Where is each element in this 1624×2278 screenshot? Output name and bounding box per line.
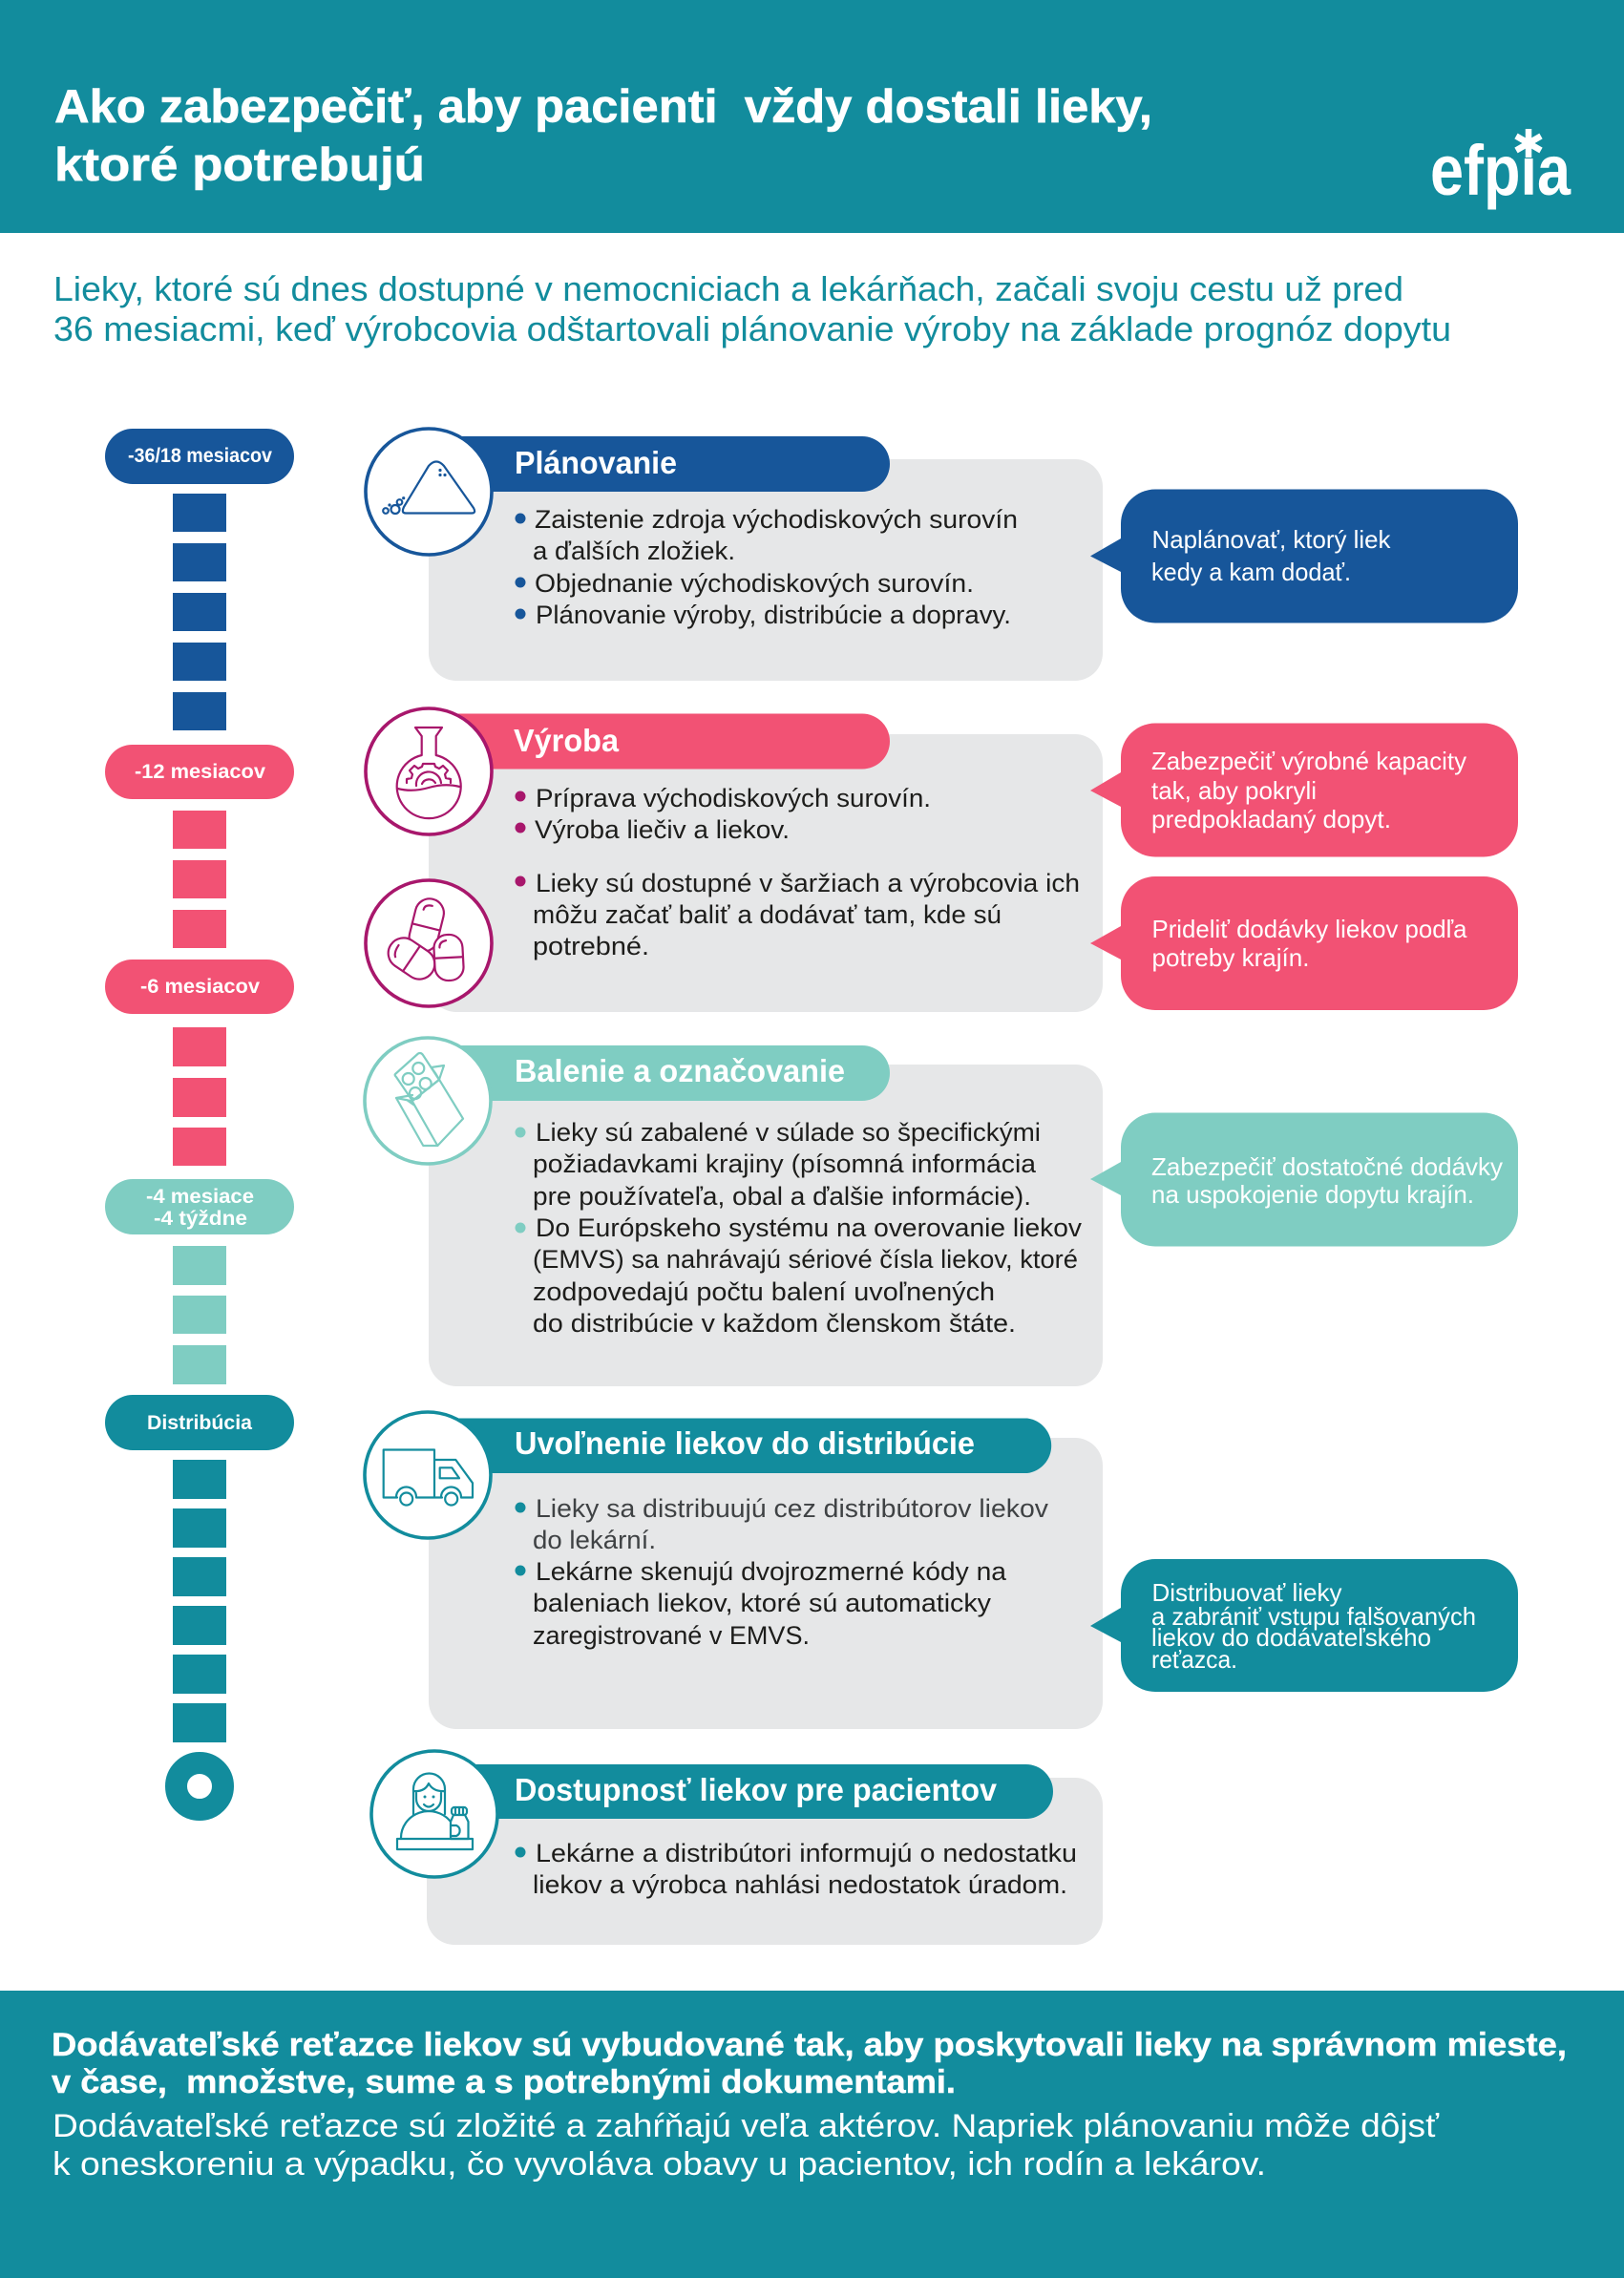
intro text: Lieky, ktoré sú dnes dostupné v nemocniciach a lekárňach, začali svoju cestu už pred xyxy=(53,269,1403,308)
heading: Uvoľnenie liekov do distribúcie: Uvoľnenie liekov do distribúcie xyxy=(515,1425,975,1461)
timeline steps: packaging xyxy=(173,1246,226,1384)
milestone: -6 mesiacov: -6 mesiacov xyxy=(140,976,260,998)
icon: raw material pile xyxy=(366,429,492,555)
footer key message: Dodávateľské reťazce liekov sú vybudované tak, aby poskytovali lieky na správnom mieste, xyxy=(52,2027,1567,2063)
panel: Dostupnosť liekov pre pacientov xyxy=(371,1751,1103,1945)
milestone: -36/18 mesiacov: -36/18 mesiacov xyxy=(128,445,272,467)
milestone: -6 mesiacov xyxy=(105,960,294,1014)
milestone: -4 mesiace -4 týždne: -4 mesiace xyxy=(146,1186,254,1208)
panel: Výroba xyxy=(366,708,1103,1012)
bullet list xyxy=(516,1494,1049,1650)
footer band xyxy=(0,1991,1624,2278)
milestone: -12 mesiacov: -12 mesiacov xyxy=(135,761,265,783)
callout: allocation: Prideliť dodávky liekov podľa xyxy=(1151,915,1467,943)
bullet list: potrebné. xyxy=(533,932,649,960)
milestone: -4 mesiace -4 týždne: -4 týždne xyxy=(154,1208,247,1230)
timeline steps: planning xyxy=(173,494,226,730)
title xyxy=(54,81,1152,191)
bullet list: zodpovedajú počtu balení uvoľnených xyxy=(533,1277,995,1306)
callout: capacity: Zabezpečiť výrobné kapacity xyxy=(1151,747,1466,775)
bullet list: Príprava východiskových surovín. xyxy=(536,784,931,812)
bullet list: Plánovanie výroby, distribúcie a dopravy. xyxy=(536,601,1011,629)
callout: supply xyxy=(1090,1113,1518,1247)
milestone: Distribúcia xyxy=(105,1395,294,1450)
milestone: -12 mesiacov xyxy=(105,745,294,799)
callout: allocation: potreby krajín. xyxy=(1151,943,1310,972)
bullet list: Do Európskeho systému na overovanie liekov xyxy=(536,1213,1083,1242)
panel: Plánovanie xyxy=(366,429,1103,681)
title: ktoré potrebujú xyxy=(54,139,425,191)
callout: distribution xyxy=(1090,1559,1518,1692)
bullet list xyxy=(516,1839,1077,1899)
timeline steps: manufacture xyxy=(173,811,226,948)
heading: Plánovanie xyxy=(429,436,890,492)
callout: supply: na uspokojenie dopytu krajín. xyxy=(1151,1180,1474,1209)
bullet list: a ďalších zložiek. xyxy=(533,537,735,565)
icon: delivery truck xyxy=(365,1412,491,1538)
panel: Uvoľnenie liekov do distribúcie xyxy=(365,1412,1103,1729)
heading: Balenie a označovanie xyxy=(429,1045,890,1101)
bullet list: do distribúcie v každom členskom štáte. xyxy=(533,1309,1016,1338)
bullet list: Objednanie východiskových surovín. xyxy=(535,569,974,598)
bullet list: Lekárne a distribútori informujú o nedostatku xyxy=(536,1839,1077,1867)
heading: Dostupnosť liekov pre pacientov xyxy=(434,1764,1053,1819)
heading: Plánovanie: Plánovanie xyxy=(515,445,677,480)
callout: planning: kedy a kam dodať. xyxy=(1151,558,1351,586)
bullet list: Lieky sú zabalené v súlade so špecifickými xyxy=(536,1118,1041,1147)
bullet list: zaregistrované v EMVS. xyxy=(533,1621,810,1650)
footer text: k oneskoreniu a výpadku, čo vyvoláva obavy u pacientov, ich rodín a lekárov. xyxy=(53,2146,1266,2183)
heading: Výroba xyxy=(429,714,890,770)
icon: pharmacist xyxy=(371,1751,497,1877)
callout: distribution: reťazca. xyxy=(1151,1645,1237,1674)
heading: Výroba: Výroba xyxy=(514,723,620,758)
title: Ako zabezpečiť, aby pacienti vždy dostali lieky, xyxy=(54,81,1152,133)
footer key message: v čase, množstve, sume a s potrebnými dokumentami. xyxy=(52,2064,956,2100)
header band xyxy=(0,0,1624,233)
bullet list: Lekárne skenujú dvojrozmerné kódy na xyxy=(536,1557,1007,1586)
footer key message xyxy=(52,2027,1567,2100)
bullet list: Výroba liečiv a liekov. xyxy=(535,815,790,844)
bullet list xyxy=(516,505,1018,629)
callout: planning xyxy=(1090,489,1518,622)
callout: distribution: liekov do dodávateľského xyxy=(1151,1623,1431,1652)
bullet list: (EMVS) sa nahrávajú sériové čísla liekov, ktoré xyxy=(533,1245,1078,1274)
heading: Dostupnosť liekov pre pacientov: Dostupnosť liekov pre pacientov xyxy=(515,1772,998,1807)
timeline steps: distribution xyxy=(173,1460,226,1742)
bullet list: Lieky sa distribuujú cez distribútorov liekov xyxy=(536,1494,1049,1523)
bullet list: Lieky sú dostupné v šaržiach a výrobcovia ich xyxy=(536,869,1080,897)
icon: flask with gear xyxy=(366,708,492,834)
callout: capacity xyxy=(1090,724,1518,857)
bullet list: baleniach liekov, ktoré sú automaticky xyxy=(533,1589,992,1617)
logo: efpia: efpia xyxy=(1430,131,1571,210)
icon: capsules xyxy=(366,880,492,1006)
callout: capacity: tak, aby pokryli xyxy=(1151,776,1317,805)
timeline xyxy=(105,429,294,1810)
callout: planning: Naplánovať, ktorý liek xyxy=(1151,525,1391,554)
milestone: -36/18 mesiacov xyxy=(105,429,294,484)
callout: allocation xyxy=(1090,876,1518,1010)
bullet list: do lekární. xyxy=(533,1526,656,1554)
bullet list: pre používateľa, obal a ďalšie informácie). xyxy=(533,1182,1031,1211)
intro text: 36 mesiacmi, keď výrobcovia odštartovali plánovanie výroby na základe prognóz dopytu xyxy=(53,309,1451,348)
bullet list: Zaistenie zdroja východiskových surovín xyxy=(535,505,1018,534)
intro text xyxy=(53,269,1451,348)
heading: Uvoľnenie liekov do distribúcie xyxy=(429,1419,1051,1473)
callout: distribution: Distribuovať lieky xyxy=(1151,1578,1342,1607)
bullet list xyxy=(516,784,1080,960)
icon: medicine box xyxy=(365,1038,491,1164)
panel: Balenie a označovanie xyxy=(365,1038,1103,1386)
timeline steps: release xyxy=(173,1027,226,1166)
callout: distribution: a zabrániť vstupu falšovaných xyxy=(1151,1602,1476,1631)
milestone: Distribúcia: Distribúcia xyxy=(147,1412,252,1434)
bullet list: liekov a výrobca nahlási nedostatok úradom. xyxy=(533,1870,1067,1899)
footer text xyxy=(53,2108,1440,2183)
heading: Balenie a označovanie: Balenie a označovanie xyxy=(515,1053,845,1088)
timeline end marker xyxy=(176,1762,223,1810)
bullet list: môžu začať baliť a dodávať tam, kde sú xyxy=(533,900,1002,929)
milestone: -4 mesiace -4 týždne xyxy=(105,1179,294,1234)
bullet list: požiadavkami krajiny (písomná informácia xyxy=(533,1150,1037,1178)
bullet list xyxy=(516,1118,1083,1338)
callout: capacity: predpokladaný dopyt. xyxy=(1151,805,1391,833)
callout: supply: Zabezpečiť dostatočné dodávky xyxy=(1151,1152,1503,1181)
footer text: Dodávateľské reťazce sú zložité a zahŕňajú veľa aktérov. Napriek plánovaniu môže dôjsť xyxy=(53,2108,1440,2144)
